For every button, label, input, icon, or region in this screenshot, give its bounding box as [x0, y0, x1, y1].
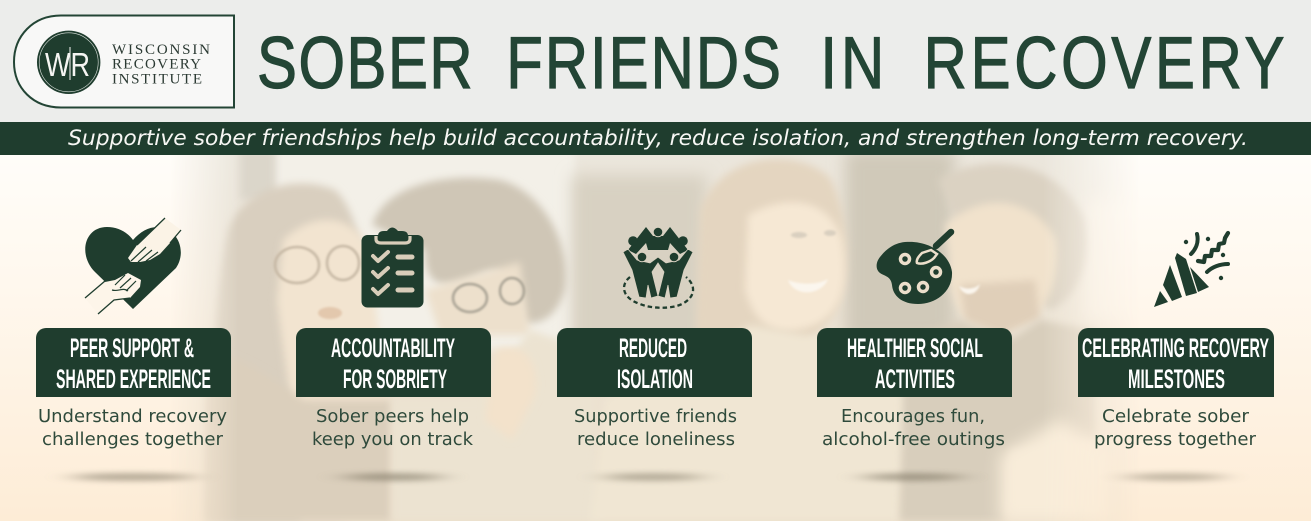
card 2 text: Sober peers help	[316, 406, 469, 427]
card 5 text	[1094, 406, 1257, 450]
woman with glasses	[216, 180, 359, 388]
card 1 text	[38, 406, 227, 450]
card 2 text	[312, 406, 474, 450]
card 4 text: alcohol-free outings	[822, 429, 1005, 450]
bearded man	[956, 162, 1086, 308]
card 4 heading: ACTIVITIES	[875, 364, 955, 394]
photo background	[0, 150, 1311, 521]
curly-haired man	[372, 178, 566, 323]
card 1 heading: PEER SUPPORT &	[70, 333, 194, 363]
card 4 text: Encourages fun,	[841, 406, 985, 427]
title: IN	[820, 23, 884, 104]
logo mark: WR	[45, 46, 90, 83]
logo wordmark	[112, 42, 210, 88]
logo wordmark: INSTITUTE	[112, 72, 202, 88]
card 3 text: Supportive friends	[574, 406, 737, 427]
card 1 text: Understand recovery	[38, 406, 227, 427]
logo mark	[37, 31, 100, 94]
subtitle band	[0, 122, 1311, 155]
card 2	[296, 328, 491, 481]
card 3 text: reduce loneliness	[577, 429, 735, 450]
card 5	[1078, 328, 1274, 481]
card 1 text: challenges together	[42, 429, 224, 450]
card 5 heading	[1078, 328, 1274, 397]
card 4	[817, 328, 1012, 481]
subtitle band: Supportive sober friendships help build accountability, reduce isolation, and strengthen long-term recovery.	[68, 126, 1248, 151]
card 1 heading	[36, 328, 231, 397]
smiling woman	[702, 157, 843, 336]
card 3 heading	[557, 328, 752, 397]
card 4 text	[822, 406, 1005, 450]
icon: palette	[877, 232, 952, 304]
card 2 heading: ACCOUNTABILITY	[331, 333, 455, 363]
icon: clipboard	[362, 228, 424, 308]
icon: heart with hands	[85, 218, 181, 314]
card 2 text: keep you on track	[312, 429, 474, 450]
card 5 text: progress together	[1094, 429, 1257, 450]
card 2 heading: FOR SOBRIETY	[343, 364, 447, 394]
card 5 text: Celebrate sober	[1102, 406, 1250, 427]
card 3 text	[574, 406, 737, 450]
title: FRIENDS	[506, 23, 781, 104]
card 4 heading	[817, 328, 1012, 397]
logo	[14, 16, 234, 108]
card 3	[557, 328, 752, 481]
icon: party popper	[1154, 233, 1228, 307]
card 2 heading	[296, 328, 491, 397]
card 3 heading: ISOLATION	[617, 364, 693, 394]
title	[257, 23, 1284, 104]
card 3 heading: REDUCED	[619, 333, 687, 363]
header paper background	[0, 0, 1311, 123]
card 1	[36, 328, 231, 481]
title: RECOVERY	[924, 23, 1284, 104]
logo wordmark: RECOVERY	[112, 56, 201, 72]
card 1 heading: SHARED EXPERIENCE	[56, 364, 211, 394]
title: SOBER	[257, 23, 473, 104]
card 4 heading: HEALTHIER SOCIAL	[847, 333, 983, 363]
card 5 heading: MILESTONES	[1128, 364, 1225, 394]
logo wordmark: WISCONSIN	[112, 42, 210, 58]
icon: group with raised arms	[623, 227, 693, 308]
